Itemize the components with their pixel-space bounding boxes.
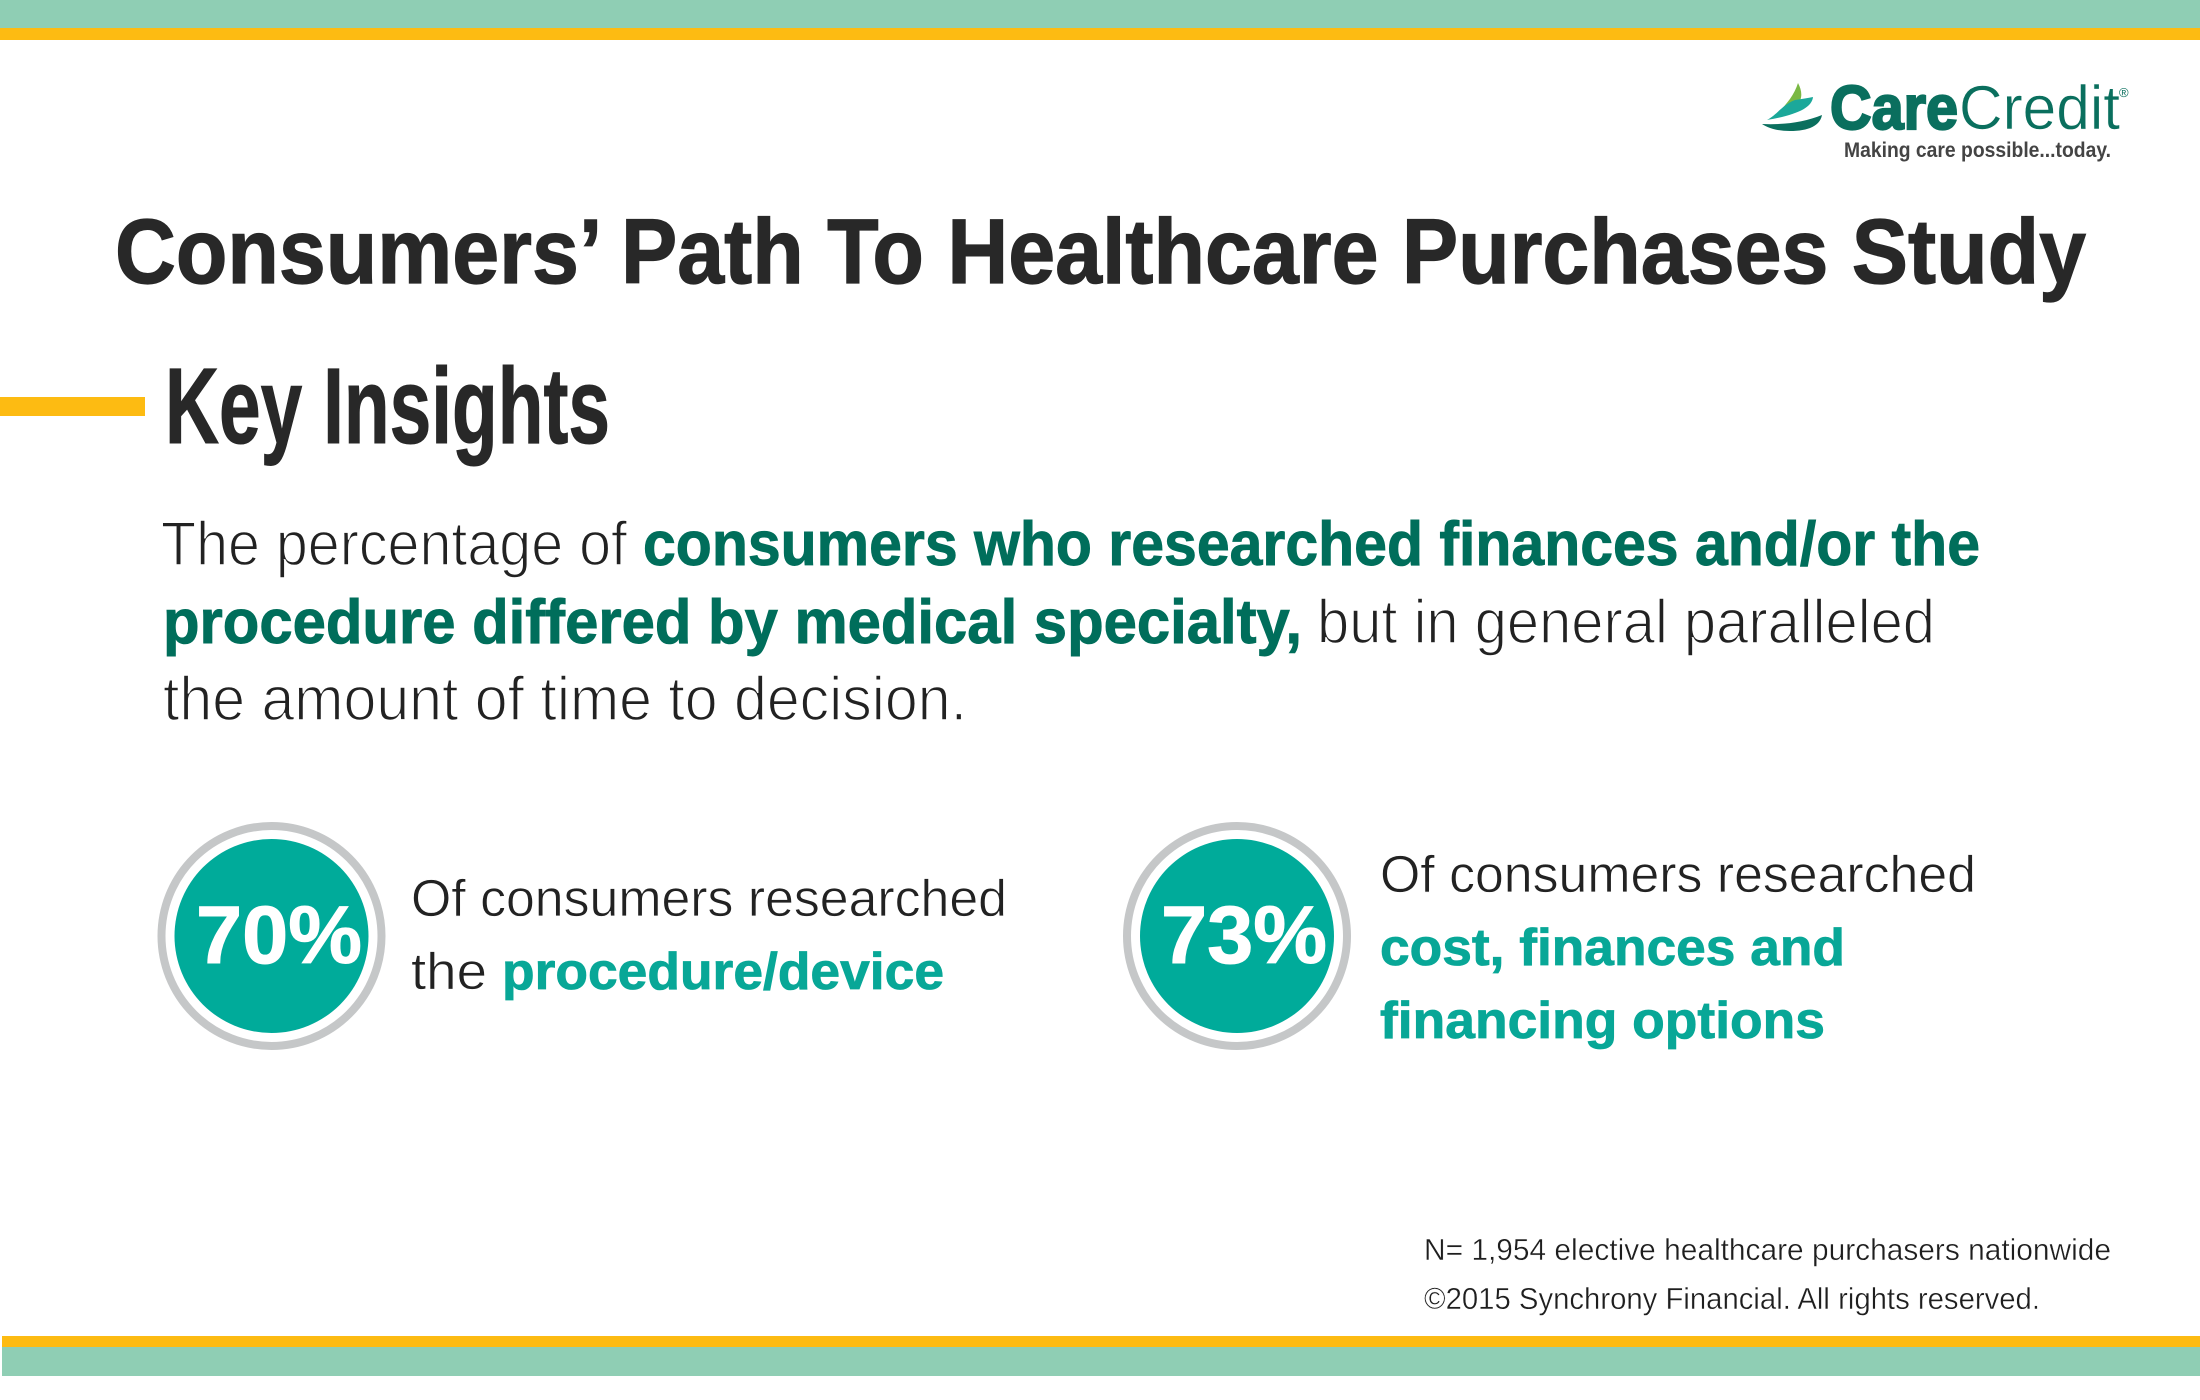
heading: Key Insights: Key Insights	[165, 345, 610, 466]
icon: 70% badge	[162, 826, 382, 1046]
stat description: Of consumers researched	[411, 870, 1007, 928]
stat description: financing options	[1380, 992, 1825, 1050]
footnote: ©2015 Synchrony Financial. All rights reserved.	[1424, 1281, 2040, 1316]
icon: 73% badge: 73%	[1161, 890, 1327, 981]
text block: key insight paragraph: procedure differed by medical specialty,	[163, 588, 1302, 657]
top banner	[0, 0, 2200, 40]
stat description: procedure/device	[502, 943, 944, 1001]
bottom banner	[2, 1336, 2200, 1376]
footnote	[1424, 1232, 2111, 1316]
text block: key insight paragraph: but in general paralleled	[1317, 588, 1935, 657]
stat description: cost, finances and	[1380, 919, 1845, 977]
text block: key insight paragraph: The percentage of	[161, 510, 628, 579]
text block: key insight paragraph: consumers who researched finances and/or the	[643, 510, 1980, 579]
stat: 70%	[162, 826, 1007, 1046]
logo wordmark: Care	[1830, 74, 1958, 143]
stat description	[411, 870, 1007, 1001]
footnote: N= 1,954 elective healthcare purchasers nationwide	[1424, 1232, 2111, 1267]
text block: key insight paragraph	[161, 510, 1980, 734]
stat description	[1380, 846, 1976, 1050]
yellow accent bar	[0, 397, 145, 416]
text block: key insight paragraph: the amount of time to decision.	[163, 665, 967, 734]
registered mark: ®	[2119, 85, 2129, 100]
stat description: Of consumers researched	[1380, 846, 1976, 904]
logo: CareCredit: Credit	[1959, 74, 2120, 143]
logo: CareCredit	[1762, 74, 2129, 162]
icon: 70% badge: 70%	[196, 890, 362, 981]
icon: logo sails	[1762, 83, 1822, 131]
stat: 73%	[1127, 826, 1976, 1050]
stat description: the	[411, 943, 487, 1001]
logo tagline: Making care possible...today.	[1844, 139, 2111, 162]
icon: 73% badge	[1127, 826, 1347, 1046]
